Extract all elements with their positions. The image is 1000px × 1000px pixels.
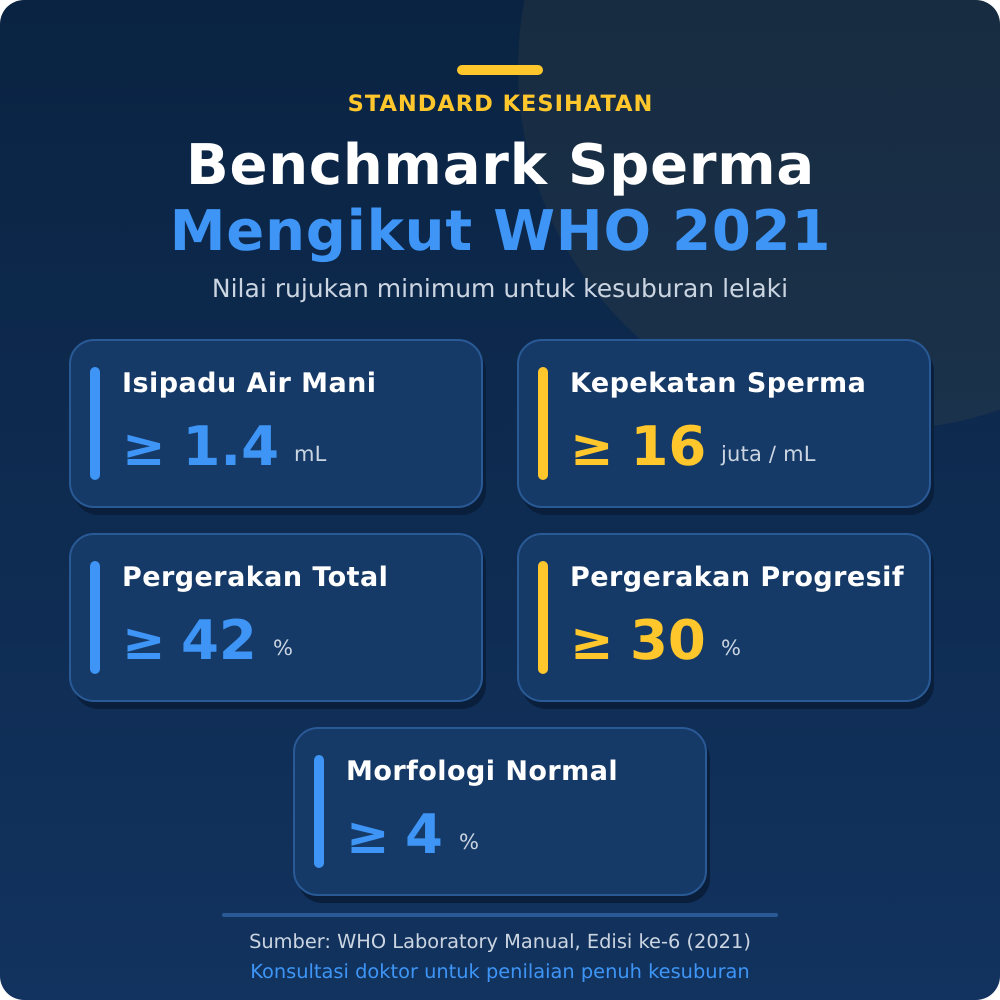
subtitle: Nilai rujukan minimum untuk kesuburan lelaki [212,274,788,303]
panel: Kepekatan Sperma: Kepekatan Sperma [570,368,866,399]
panel: Pergerakan Total: ≥ [122,612,166,672]
advice note: Konsultasi doktor untuk penilaian penuh kesuburan [250,960,750,983]
panel: Isipadu Air Mani: Isipadu Air Mani [122,368,376,399]
panel: Pergerakan Total: 42 [181,608,257,672]
panel: Pergerakan Progresif: ≥ [570,612,614,672]
panel: Morfologi Normal: % [459,830,479,854]
panel: Morfologi Normal: Morfologi Normal [346,756,618,787]
panel: Kepekatan Sperma [518,340,934,515]
accent bar [457,65,543,75]
title: Benchmark Sperma [186,133,815,198]
decorative circle [518,0,1000,430]
panel: Pergerakan Total [70,534,486,709]
panel: Kepekatan Sperma: 16 [630,414,706,478]
title [170,133,831,264]
eyebrow heading: STANDARD KESIHATAN [348,91,653,117]
panel: Morfologi Normal: ≥ [346,806,390,866]
panel: Morfologi Normal [294,728,710,903]
panel: Pergerakan Progresif: % [721,636,741,660]
panel: Morfologi Normal: 4 [405,802,443,866]
panel: Pergerakan Progresif [518,534,934,709]
title: Mengikut WHO 2021 [170,199,831,264]
panel: Isipadu Air Mani: 1.4 [182,414,279,478]
panel: Isipadu Air Mani: mL [294,442,327,466]
panel: Isipadu Air Mani: ≥ [122,418,166,478]
panel: Kepekatan Sperma: juta / mL [720,442,816,466]
panel: Pergerakan Progresif: 30 [630,608,706,672]
source note: Sumber: WHO Laboratory Manual, Edisi ke-6 (2021) [249,930,751,953]
panel: Pergerakan Progresif: Pergerakan Progresif [570,562,904,593]
panel: Pergerakan Total: Pergerakan Total [122,562,388,593]
panel: Isipadu Air Mani [70,340,486,515]
panel: Kepekatan Sperma: ≥ [570,418,614,478]
panel: Pergerakan Total: % [273,636,293,660]
